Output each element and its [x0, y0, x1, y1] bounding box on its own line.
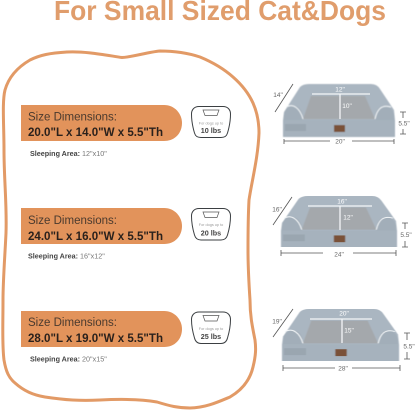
measure text 3 [272, 310, 415, 372]
measure text 2: 24" [334, 252, 344, 258]
size row 3 [21, 311, 182, 364]
measure text 3: 28" [338, 366, 348, 372]
measure text 3: 5.5" [403, 344, 415, 350]
sleeping area 3: Sleeping Area: 20"x15" [30, 354, 107, 364]
size row 1 [21, 105, 182, 158]
measure text 1 [273, 86, 410, 146]
measure lines 2 [273, 197, 408, 256]
measure text 2 [272, 198, 412, 258]
measure text 3: 20" [339, 310, 349, 318]
orange label 2 [21, 208, 182, 244]
bed diagram 2 [272, 196, 412, 258]
measure text 1: 14" [273, 92, 283, 99]
size heading 2: Size Dimensions: [28, 215, 117, 227]
icon: weight scale 10 lbs [192, 106, 230, 138]
measure text 1: 5.5" [398, 120, 410, 128]
dimensions 1: 20.0"L x 14.0"W x 5.5"Th [28, 127, 163, 139]
bed body 2 [281, 196, 397, 247]
icon: weight scale 25 lbs: For dogs up to [199, 327, 223, 331]
orange label 3 [21, 311, 182, 347]
measure text 2: 16" [337, 198, 347, 206]
bed diagram 3 [272, 309, 415, 372]
sleeping area 2: Sleeping Area: 16"x12" [28, 252, 105, 260]
measure text 3: 15" [344, 328, 354, 334]
size row 2 [21, 208, 182, 260]
measure text 2: 16" [272, 206, 282, 214]
icon: weight scale 25 lbs: 25 lbs [201, 332, 221, 341]
icon: weight scale 10 lbs: For dogs up to [199, 122, 223, 126]
icon: weight scale 20 lbs [192, 208, 230, 240]
icon: weight scale 20 lbs: 20 lbs [201, 228, 221, 238]
bed body 1 [283, 84, 395, 137]
orange label 1 [21, 105, 182, 141]
dimensions 3: 28.0"L x 19.0"W x 5.5"Th [28, 333, 163, 345]
icon: weight scale 25 lbs [192, 312, 230, 344]
bed body 3 [282, 309, 399, 361]
measure text 3: 19" [272, 318, 282, 326]
measure text 1: 12" [335, 86, 345, 94]
measure text 2: 5.5" [400, 232, 412, 239]
icon: weight scale 20 lbs: For dogs up to [199, 223, 223, 227]
measure lines 1 [275, 84, 406, 144]
dimensions 2: 24.0"L x 16.0"W x 5.5"Th [28, 231, 163, 243]
bed diagram 1 [273, 84, 410, 146]
measure text 1: 10" [342, 103, 352, 110]
measure text 2: 12" [343, 214, 353, 222]
measure text 1: 20" [335, 138, 345, 146]
size heading 3: Size Dimensions: [28, 317, 117, 329]
measure lines 3 [273, 309, 410, 371]
size heading 1: Size Dimensions: [28, 112, 117, 124]
sleeping area 1: Sleeping Area: 12"x10" [30, 149, 107, 158]
icon: weight scale 10 lbs: 10 lbs [201, 126, 221, 135]
panel outline: wavy rounded frame [3, 51, 259, 408]
